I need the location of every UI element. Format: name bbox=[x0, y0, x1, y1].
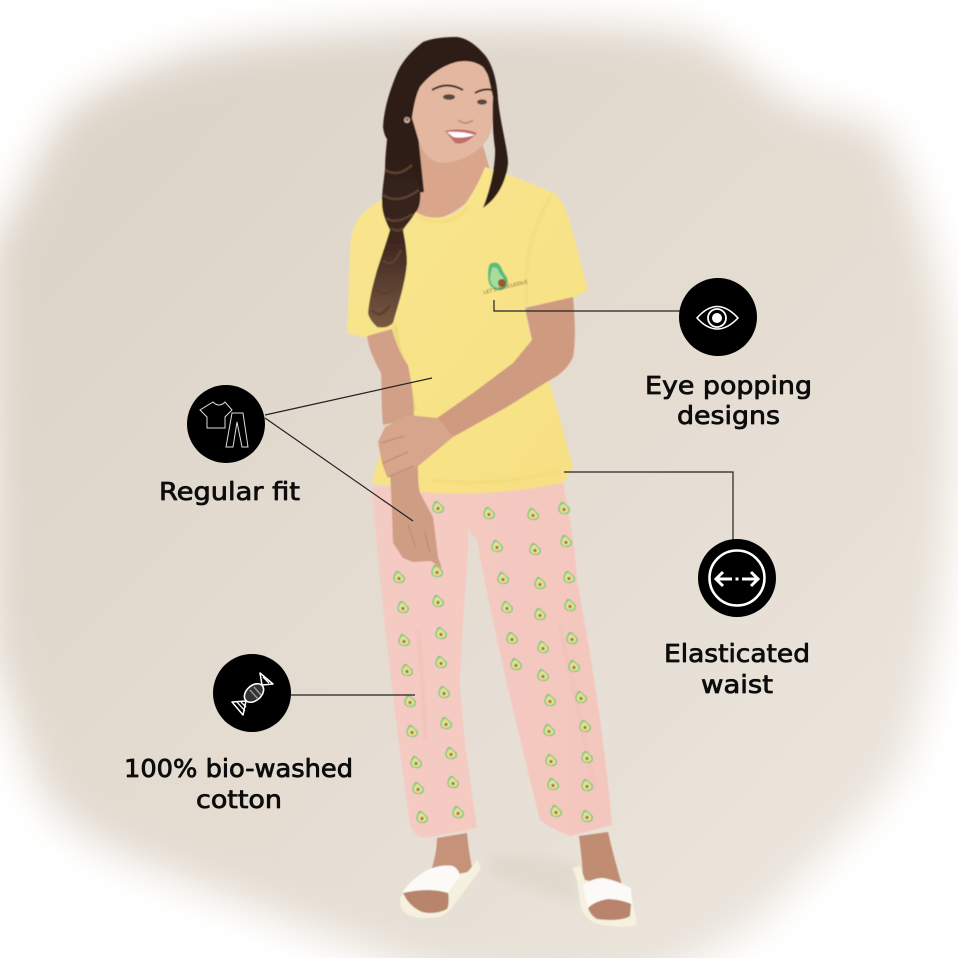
icon: eye bbox=[679, 278, 757, 356]
label text: Elasticated bbox=[664, 639, 810, 668]
callout: regular fit bbox=[159, 385, 300, 506]
label text bbox=[664, 639, 810, 699]
hair behind ear bbox=[385, 125, 424, 195]
line: regular fit to shirt bbox=[265, 378, 432, 415]
line: bio-washed cotton bbox=[290, 694, 415, 696]
line: elasticated waist bbox=[564, 472, 733, 540]
braid bbox=[368, 140, 420, 328]
icon: DNA helix bbox=[213, 654, 291, 732]
left leg and foot bbox=[432, 833, 472, 880]
line: regular fit to pants bbox=[265, 418, 413, 521]
face bbox=[412, 61, 493, 163]
label text: Eye popping bbox=[645, 371, 812, 400]
floor shadow bbox=[490, 854, 578, 905]
label text: Regular fit bbox=[159, 477, 300, 506]
arms bbox=[367, 297, 575, 569]
label text: 100% bio-washed bbox=[124, 754, 353, 783]
label text: cotton bbox=[196, 785, 282, 814]
connector lines bbox=[265, 300, 733, 695]
left arm bbox=[367, 329, 414, 425]
label text bbox=[124, 754, 353, 814]
chest print: avocado with slogan: LET'S AVOCUDDLE bbox=[483, 279, 529, 296]
right arm bbox=[437, 297, 575, 437]
label text: waist bbox=[701, 670, 773, 699]
pants bbox=[372, 478, 612, 838]
label text bbox=[645, 371, 812, 430]
callout: elasticated waist bbox=[664, 539, 810, 699]
callout: bio-washed cotton bbox=[124, 654, 353, 814]
model figure bbox=[347, 37, 637, 927]
avocado print bbox=[393, 501, 593, 823]
clasping hand bbox=[378, 415, 453, 477]
chest print: avocado with slogan bbox=[483, 263, 529, 296]
t-shirt bbox=[347, 167, 588, 494]
hair bbox=[383, 37, 497, 145]
neck bbox=[412, 135, 490, 218]
lower forearm and pointing hand bbox=[390, 464, 442, 569]
line: eye popping designs bbox=[494, 300, 680, 311]
callout: eye popping designs bbox=[645, 278, 812, 430]
icon: arrows in circle bbox=[698, 539, 776, 617]
right leg and foot bbox=[579, 832, 622, 885]
icon: t-shirt and pants bbox=[187, 385, 265, 463]
shirt seams and folds bbox=[395, 193, 560, 482]
label text: designs bbox=[677, 401, 780, 430]
facial features bbox=[404, 86, 492, 144]
right hair lock bbox=[483, 53, 508, 208]
braid strands bbox=[372, 165, 419, 314]
feet and slippers bbox=[400, 832, 637, 927]
